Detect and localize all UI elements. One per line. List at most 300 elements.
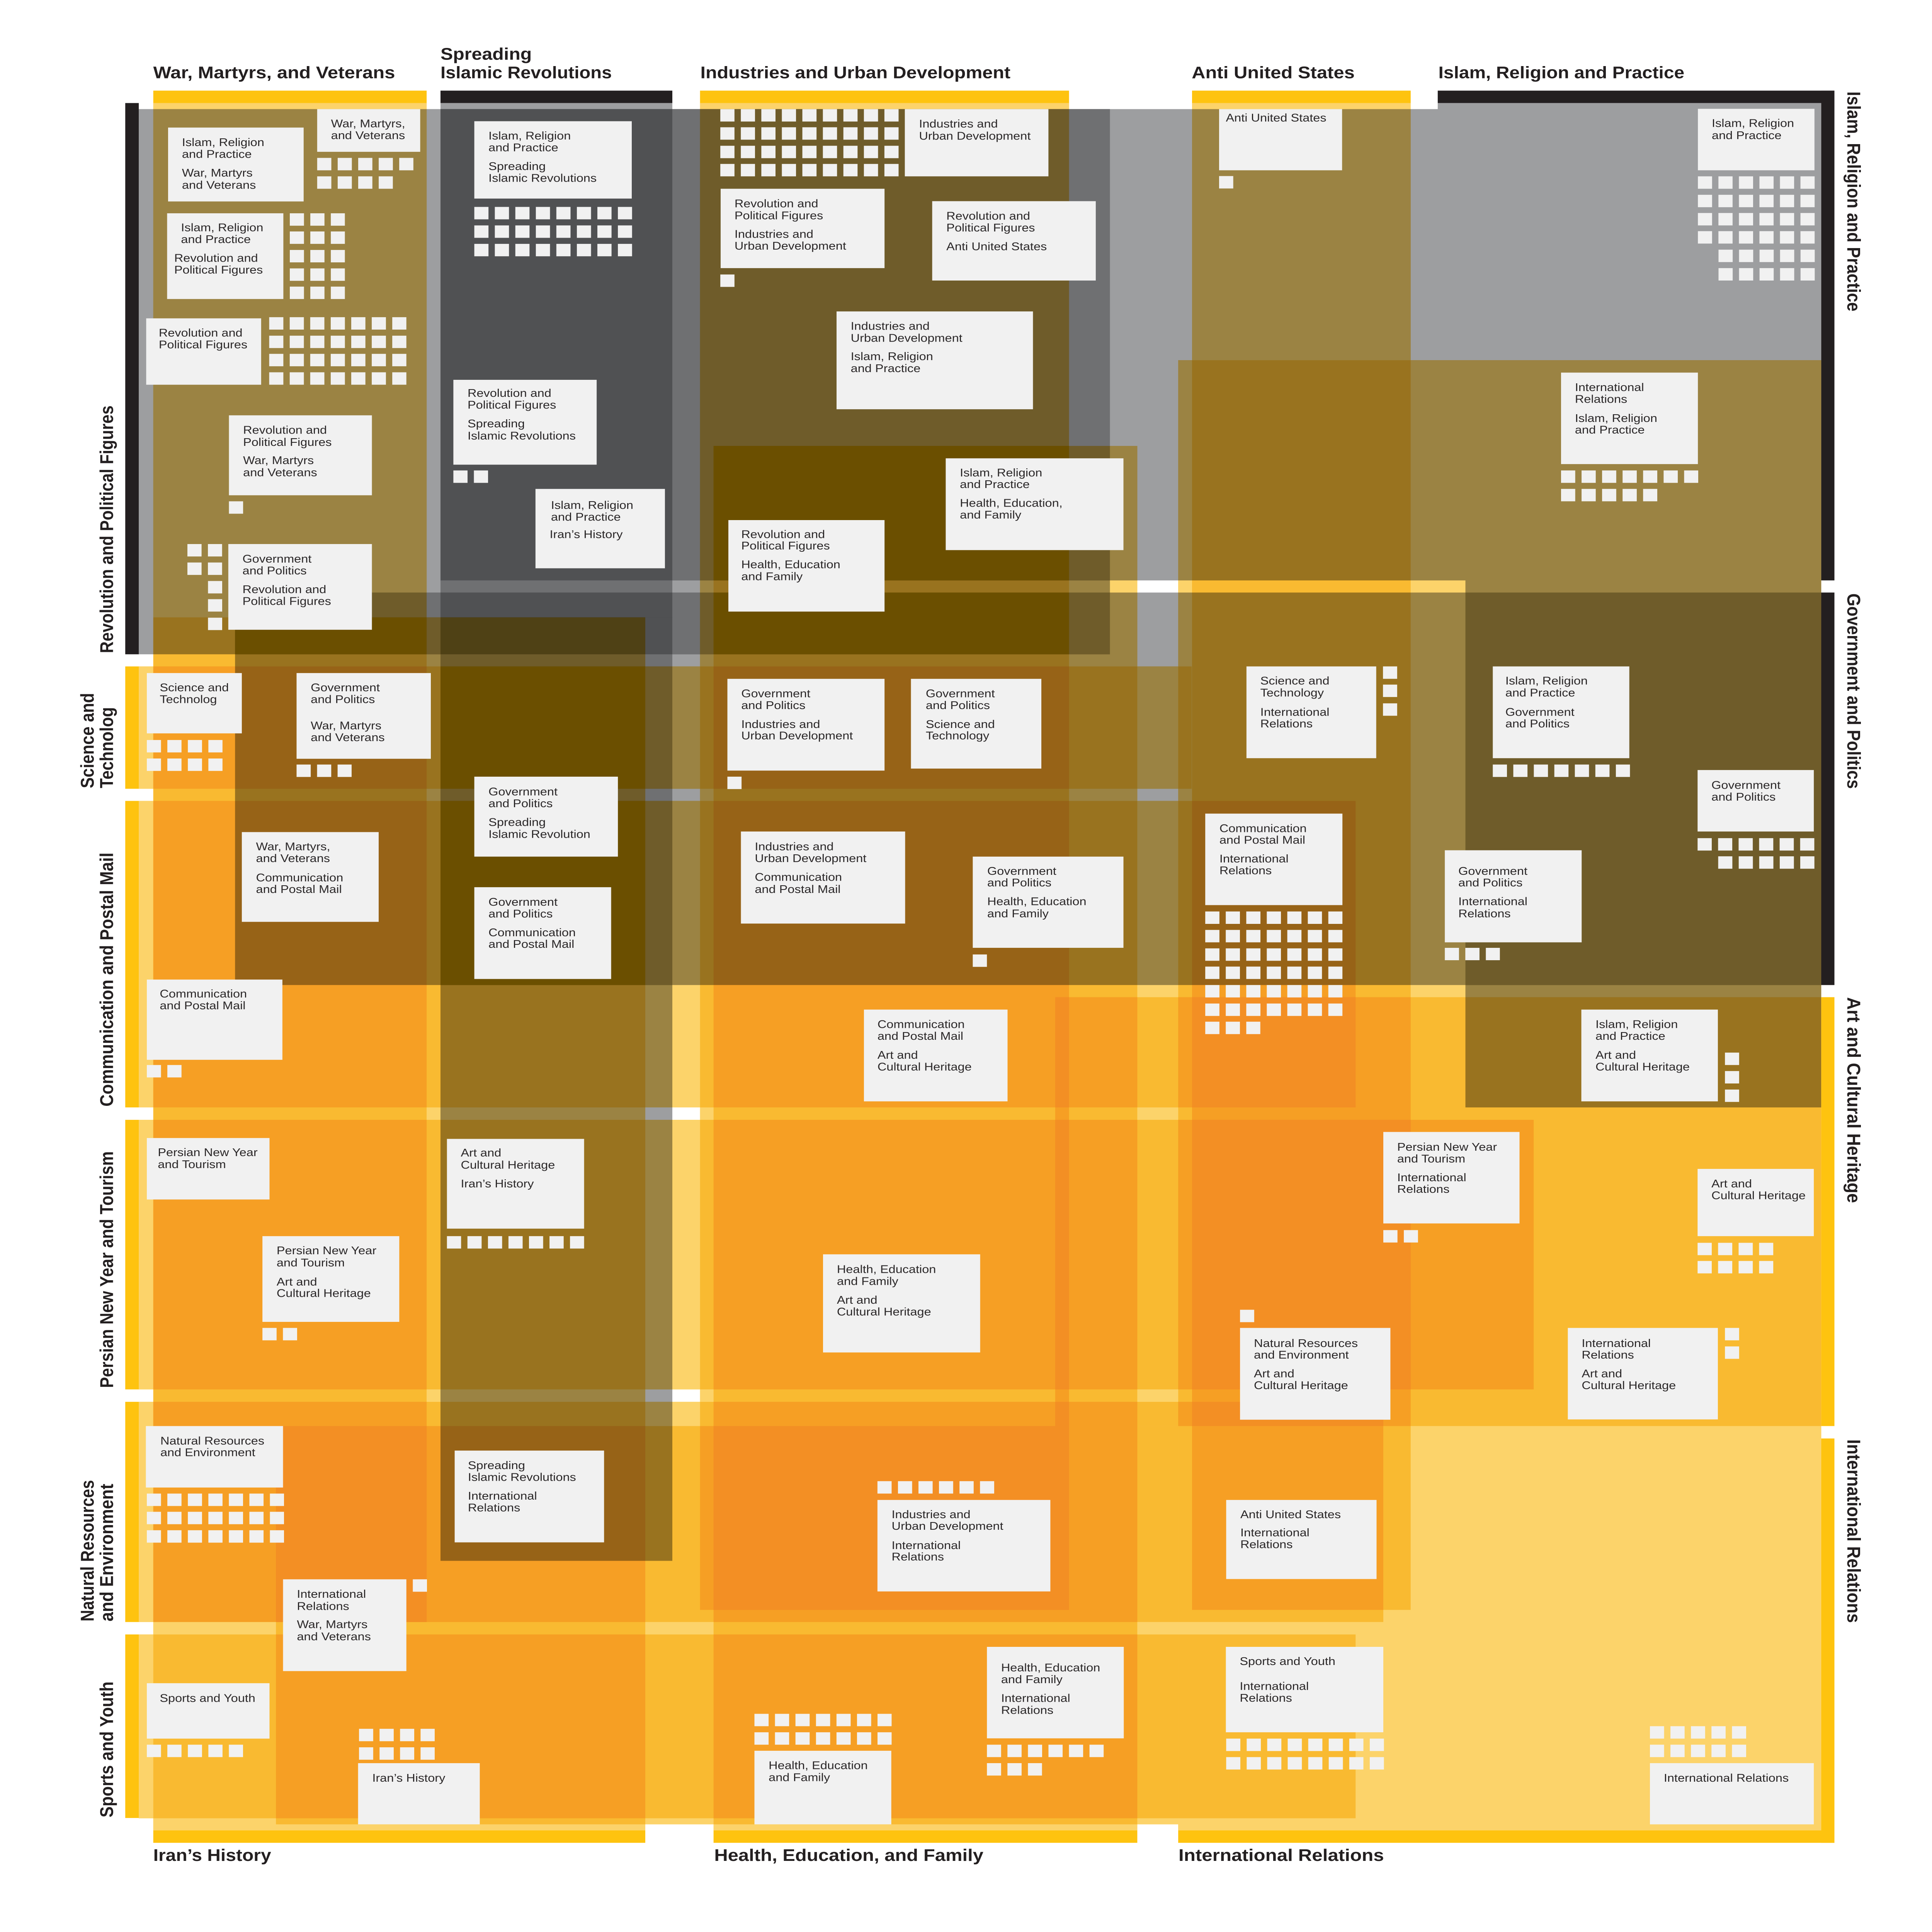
card: Health, Education and Family: and Family (769, 1771, 830, 1784)
squares (754, 1720, 892, 1738)
card: Government / War: and Veterans (311, 731, 385, 744)
card: Industries / Islam: Islam, Religion (851, 350, 933, 363)
card: Communication / International: Relations (1219, 864, 1272, 877)
band: Art and Cultural Heritage (1055, 997, 1821, 1426)
side heading: Government and Politics: Government and Politics (1843, 594, 1864, 789)
card: War / Communication: and Postal Mail (256, 883, 342, 896)
card: Government / Industries: and Politics (741, 699, 806, 712)
card: Industries / Communication: Urban Development (755, 852, 867, 865)
card: Communication and Postal Mail: and Postal Mail (160, 999, 246, 1012)
card: Industries / International: International (892, 1539, 961, 1551)
side heading: Science and Technolog: Technolog (96, 707, 117, 788)
squares (187, 550, 222, 624)
card: Health / International: International (1001, 1692, 1070, 1704)
card: Islam / Spreading (474, 121, 632, 199)
card: Science / International (1247, 667, 1376, 758)
card: Government / Health: Government (987, 865, 1056, 878)
card: Science / International: Relations (1260, 717, 1313, 730)
card: Industries and Urban Development: Industries and (919, 117, 998, 130)
squares (1240, 1308, 1254, 1324)
card: Government / Spreading: Government (488, 785, 558, 798)
card: War / Communication: and Veterans (256, 852, 330, 865)
card: Industries / Islam: Industries and (851, 320, 930, 332)
heading: Anti United States: Anti United States (1192, 63, 1355, 82)
card: Government / Revolution: Revolution and (243, 583, 326, 596)
card: Persian / Art: Cultural Heritage (277, 1287, 371, 1299)
card: Revolution / Anti United States (932, 201, 1096, 281)
band: right dark block (1465, 580, 1821, 1107)
squares (1725, 1334, 1739, 1353)
card: Islam / Iran's History: Iran’s History (549, 528, 623, 541)
card: Health / Art: Cultural Heritage (837, 1305, 931, 1318)
card: Government / Health: Health, Education (987, 895, 1087, 908)
card: International / Islam: Islam, Religion (1575, 412, 1657, 425)
card: War, Martyrs, and Veterans (317, 109, 420, 152)
card: Persian / International: and Tourism (1397, 1152, 1465, 1165)
card: International / Art: Cultural Heritage (1582, 1379, 1676, 1392)
card: Revolution / Anti United States: Revolution and (946, 209, 1030, 222)
squares (317, 164, 413, 182)
card: Natural Resources / Art (1240, 1328, 1390, 1420)
side heading: Art and Cultural Heritage: Art and Cultural Heritage (1843, 997, 1864, 1203)
card: Sports / International: Sports and Youth (1240, 1655, 1335, 1668)
card: Anti United States / International: International (1240, 1526, 1310, 1539)
squares (147, 1500, 284, 1536)
card: Revolution / Industries: Revolution and (735, 197, 818, 210)
card: Government / International: and Politics (1458, 876, 1522, 889)
card: Industries / International: Relations (892, 1550, 944, 1563)
squares (1383, 1228, 1418, 1245)
card: Science / International: Science and (1260, 674, 1330, 687)
band: War, Martyrs, and Veterans (153, 103, 427, 1622)
card: Revolution / War: Revolution and (243, 423, 327, 436)
card: Persian New Year and Tourism: Persian New Year (158, 1146, 258, 1159)
card: Islam / Health: Health, Education, (960, 497, 1063, 509)
card: Persian / Art: Persian New Year (277, 1244, 376, 1257)
card: Islam / Art: Art and (1595, 1048, 1636, 1061)
card: Islam, Religion and Practice: Islam, Religion (1712, 117, 1794, 129)
squares (147, 1063, 182, 1080)
card: Government / International: Relations (1458, 907, 1511, 920)
card: Communication / Art: and Postal Mail (878, 1030, 963, 1043)
card: Communication / International: International (1219, 852, 1289, 865)
card: Industries / Communication (741, 832, 905, 923)
card: Health / International (987, 1647, 1124, 1738)
side heading: Science and Technolog (77, 693, 117, 788)
card: War / Communication (242, 832, 379, 922)
card: Government / Science (911, 679, 1041, 769)
card: Government / Revolution: Political Figures (243, 595, 331, 607)
card: Revolution / War: and Veterans (243, 466, 317, 479)
squares (973, 952, 987, 969)
card: Anti United States / International: Relations (1240, 1538, 1293, 1551)
squares (1226, 1745, 1384, 1763)
card: War, Martyrs, and Veterans: War, Martyrs, (331, 117, 405, 130)
card: International / Art: Art and (1582, 1367, 1622, 1380)
card: Communication / Art: Cultural Heritage (878, 1060, 972, 1073)
band: Science and Technology (139, 667, 1192, 789)
card: War / Communication: Communication (256, 871, 343, 884)
card: Revolution / War: War, Martyrs (243, 454, 314, 467)
side heading: Science and Technolog: Science and (77, 693, 98, 788)
card: Islam / Health: and Practice (960, 478, 1030, 491)
card: Revolution / Health: Revolution and (741, 528, 825, 541)
squares (262, 1326, 297, 1342)
card: Art / Iran's History: Cultural Heritage (461, 1158, 555, 1171)
card: Government / Health (973, 857, 1124, 948)
card: Revolution / Anti United States: Anti United States (946, 240, 1047, 253)
card: International Relations (1650, 1763, 1814, 1824)
card: Health / International: Health, Education (1001, 1661, 1100, 1674)
band: Anti United States (1192, 103, 1411, 1610)
card: Natural Resources and Environment (146, 1426, 283, 1488)
squares (453, 468, 488, 485)
card: Science and Technolog: Technolog (160, 693, 217, 706)
card: Government / Industries: Industries and (741, 718, 820, 730)
squares (1725, 1059, 1739, 1096)
card: Communication / Art: Communication (878, 1018, 965, 1031)
card: Revolution / Industries: Political Figures (735, 209, 823, 222)
card: International / Islam (1561, 372, 1698, 464)
band: Sports and Youth (139, 1634, 1355, 1818)
card: Anti United States / International (1226, 1500, 1376, 1579)
card: Spreading / International: International (468, 1490, 537, 1502)
card: Government / Health: and Politics (987, 876, 1051, 889)
card: Revolution and Political Figures (146, 318, 261, 385)
card: Health / Art (823, 1254, 980, 1352)
side heading: Persian New Year and Tourism: Persian New Year and Tourism (96, 1151, 117, 1388)
squares (229, 499, 243, 516)
band: International Relations column (1178, 360, 1821, 1830)
card: Communication / International (1205, 814, 1342, 905)
card: Government / Science: Government (926, 687, 995, 700)
card: Islam / Revolution: Revolution and (174, 252, 258, 264)
card: Islam / Spreading: Islamic Revolutions (488, 172, 597, 184)
card: Natural Resources / Art: Natural Resources (1254, 1337, 1358, 1350)
card: Persian / International (1383, 1132, 1519, 1223)
side heading: Islam, Religion and Practice: Islam, Religion and Practice (1843, 92, 1864, 311)
card: Revolution / Spreading: Political Figures (468, 398, 556, 411)
card: Communication / International: Communication (1219, 822, 1307, 835)
card: International / Islam: Relations (1575, 393, 1627, 405)
card: Government / Communication (474, 887, 611, 979)
card: Government / Communication: and Postal Mail (488, 938, 574, 951)
card: Islam / War: Islam, Religion (182, 136, 264, 149)
squares (1698, 182, 1815, 274)
card: Islam / Government: Islam, Religion (1505, 674, 1588, 687)
band: Health, Education, and Family (714, 446, 1137, 1830)
side heading: International Relations: International Relations (1843, 1439, 1864, 1623)
card: Islam / Government: and Practice (1505, 686, 1575, 699)
squares (297, 762, 352, 779)
band: Communication and Postal Mail (139, 801, 1355, 1107)
card: Islam / Government: Government (1505, 706, 1575, 718)
card: Islam / Art: and Practice (1595, 1030, 1665, 1043)
card: Industries / Islam (837, 311, 1033, 409)
card: Islam / Revolution: Islam, Religion (181, 221, 263, 234)
card: Islam / Revolution: Political Figures (174, 264, 263, 276)
card: Industries / Islam: Urban Development (851, 332, 963, 344)
band: Spreading Islamic Revolutions (440, 103, 672, 1561)
card: Persian / International: Relations (1397, 1183, 1449, 1196)
squares (269, 323, 406, 379)
card: Government and Politics: Government (1711, 779, 1781, 791)
card: Islam / War (168, 128, 304, 201)
card: Art / Iran's History: Art and (461, 1146, 501, 1159)
card: Revolution / Industries (721, 189, 884, 268)
card: Natural Resources / Art: and Environment (1254, 1348, 1349, 1361)
card: Science and Technolog: Science and (160, 681, 229, 694)
heading: Islam, Religion and Practice: Islam, Religion and Practice (1439, 63, 1684, 82)
squares (359, 1735, 435, 1753)
card: Persian / Art (262, 1236, 399, 1322)
card: Sports / International (1226, 1647, 1383, 1732)
heading: War, Martyrs, and Veterans: War, Martyrs, and Veterans (153, 63, 395, 82)
card: Art / Iran's History: Iran’s History (461, 1177, 534, 1190)
heading: Industries and Urban Development: Industries and Urban Development (700, 63, 1010, 82)
band: Persian New Year and Tourism (139, 1120, 1534, 1389)
card: Government / Industries (727, 679, 884, 770)
card: Government / Revolution (228, 544, 372, 630)
heading: International Relations: International Relations (1179, 1846, 1384, 1865)
card: Islam / Health (946, 458, 1124, 550)
card: Persian / Art: and Tourism (277, 1256, 345, 1269)
card: Islam / Art (1581, 1010, 1718, 1101)
card: International / Art: International (1582, 1337, 1651, 1350)
squares (474, 213, 632, 250)
card: Government / Spreading (474, 777, 618, 857)
card: Science / International: Technology (1260, 686, 1324, 699)
squares (987, 1751, 1104, 1769)
card: Industries / Islam: and Practice (851, 362, 920, 374)
card: Revolution / Anti United States: Political Figures (946, 221, 1035, 234)
card: Communication and Postal Mail (147, 980, 282, 1060)
card: Art and Cultural Heritage: Cultural Heritage (1711, 1189, 1806, 1202)
card: Government / Health: and Family (987, 907, 1049, 920)
card: Communication / Art: Art and (878, 1048, 918, 1061)
squares (720, 272, 735, 289)
squares (1383, 673, 1397, 709)
card: Revolution / Health: and Family (741, 570, 803, 583)
card: Communication / Art (864, 1010, 1008, 1101)
card: Industries and Urban Development: Urban Development (919, 129, 1031, 142)
side heading: Communication and Postal Mail: Communication and Postal Mail (96, 852, 117, 1107)
card: Iran's History (358, 1763, 480, 1824)
card: Islam / Art: Cultural Heritage (1595, 1060, 1690, 1073)
card: Government and Politics: and Politics (1711, 791, 1776, 803)
squares (447, 1234, 584, 1251)
card: Revolution / Health: Health, Education (741, 558, 840, 571)
card: Spreading / International: Spreading (468, 1459, 525, 1472)
heading: Spreading Islamic Revolutions: Spreading (440, 44, 532, 63)
card: Natural Resources and Environment: Natural Resources (160, 1434, 264, 1447)
card: Government / War: and Politics (311, 693, 375, 706)
card: Government / Science: and Politics (926, 699, 990, 712)
card: International / War: International (297, 1588, 366, 1600)
card: Art and Cultural Heritage: Art and (1711, 1177, 1752, 1190)
card: Islam / Spreading: Spreading (488, 160, 546, 173)
squares (1650, 1732, 1746, 1751)
card: Sports / International: Relations (1240, 1692, 1292, 1704)
band: Government and Politics (235, 592, 1821, 985)
card: Islam / Art: Islam, Religion (1595, 1018, 1678, 1031)
card: Islam / War: War, Martyrs (182, 167, 253, 179)
squares (147, 746, 223, 765)
card: International / Islam: International (1575, 381, 1644, 394)
squares (147, 1743, 243, 1759)
card: Health / Art: and Family (837, 1275, 898, 1287)
card: Islam / Health: and Family (960, 509, 1022, 521)
card: Industries and Urban Development (905, 109, 1048, 176)
card: Art / Iran's History (447, 1139, 584, 1229)
side heading: Sports and Youth: Sports and Youth (96, 1682, 117, 1817)
card: Health, Education and Family: Health, Education (769, 1759, 868, 1772)
card: Communication / International: and Postal Mail (1219, 833, 1305, 846)
card: Revolution / Health (728, 520, 884, 612)
card: Islam / Revolution: and Practice (181, 233, 251, 246)
card: Revolution / War: Political Figures (243, 436, 332, 449)
card: Government / International: Government (1458, 865, 1527, 878)
heading: Health, Education, and Family: Health, Education, and Family (714, 1846, 984, 1865)
card: Government / War: War, Martyrs (311, 719, 381, 732)
card: Revolution / Spreading: Spreading (468, 417, 525, 430)
card: Revolution / Industries: Industries and (735, 228, 813, 240)
card: Industries / Communication: Industries and (755, 840, 833, 853)
band: Industries and Urban Development (700, 103, 1069, 1610)
card: Industries / Communication: and Postal Mail (755, 883, 841, 896)
band: Revolution and Political Figures (139, 109, 1110, 654)
card: Persian New Year and Tourism (147, 1138, 270, 1199)
card: Health / Art: Art and (837, 1293, 878, 1306)
card: Government / War: Government (311, 681, 380, 694)
card: Islam, Religion and Practice: and Practice (1712, 129, 1782, 142)
squares (878, 1479, 994, 1496)
side heading: Revolution and Political Figures: Revolution and Political Figures (96, 405, 117, 653)
card: Spreading / International (455, 1451, 604, 1543)
card: Persian New Year and Tourism: and Tourism (158, 1158, 226, 1170)
card: Industries / International: Urban Development (892, 1519, 1003, 1532)
card: Health / International: Relations (1001, 1704, 1053, 1716)
card: Government / Communication: and Politics (488, 907, 553, 920)
band: Islam, Religion and Practice (440, 103, 1821, 580)
card: Islam / Iran's History (536, 489, 665, 568)
card: Revolution / Spreading: Revolution and (468, 387, 551, 400)
band: Iran's History (153, 617, 645, 1830)
card: Islam / Government: and Politics (1505, 717, 1570, 730)
squares (1445, 946, 1500, 963)
squares (727, 775, 742, 791)
card: Islam / Revolution (167, 213, 283, 299)
card: Communication and Postal Mail: Communication (160, 987, 247, 1000)
card: Islam / Iran's History: and Practice (551, 510, 621, 523)
heading: Spreading Islamic Revolutions: Islamic Revolutions (440, 63, 612, 82)
card: Government / Science: Technology (926, 729, 990, 742)
card: International / War: War, Martyrs (297, 1618, 367, 1631)
card: Government / Communication: Communication (488, 926, 576, 939)
card: Industries / Communication: Communication (755, 871, 842, 883)
card: Revolution / Spreading (453, 380, 597, 465)
card: Revolution / Health: Political Figures (741, 539, 830, 552)
card: International / War: and Veterans (297, 1630, 371, 1643)
card: Sports and Youth (147, 1683, 270, 1739)
card: Spreading / International: Relations (468, 1501, 520, 1514)
squares (720, 115, 899, 170)
card: Revolution and Political Figures: Revolution and (159, 326, 243, 339)
card: Natural Resources and Environment: and Environment (160, 1446, 255, 1459)
card: Revolution / Spreading: Islamic Revolutions (468, 429, 576, 442)
squares (1205, 918, 1342, 1028)
card: Government / Industries: Urban Development (741, 729, 853, 742)
card: Government / International: International (1458, 895, 1527, 908)
card: Science and Technolog (147, 673, 242, 733)
card: Persian / International: Persian New Year (1397, 1141, 1497, 1153)
card: Government / International (1445, 850, 1582, 942)
card: War, Martyrs, and Veterans: and Veterans (331, 129, 405, 142)
card: International / War (283, 1579, 406, 1671)
card: Spreading / International: Islamic Revolutions (468, 1471, 576, 1483)
card: Persian / Art: Art and (277, 1275, 317, 1288)
card: Government / Revolution: Government (243, 552, 312, 565)
card: Government / Revolution: and Politics (243, 564, 307, 577)
squares (413, 1577, 427, 1594)
card: Anti United States / International: Anti United States (1240, 1508, 1341, 1520)
card: International / War: Relations (297, 1600, 349, 1612)
card: International / Islam: and Practice (1575, 423, 1645, 436)
card: Revolution / War (229, 415, 372, 495)
card: Government / Communication: Government (488, 895, 558, 908)
card: Sports and Youth: Sports and Youth (160, 1692, 255, 1704)
squares (1697, 1249, 1773, 1267)
card: International / Art: Relations (1582, 1348, 1634, 1361)
squares (1219, 174, 1233, 190)
card: Revolution and Political Figures: Political Figures (159, 338, 247, 351)
side heading: Natural Resources and Environment: Natural Resources (77, 1480, 98, 1621)
card: Health, Education and Family (754, 1751, 891, 1824)
side heading: Natural Resources and Environment: and Environment (96, 1484, 117, 1621)
card: Natural Resources / Art: Cultural Heritage (1254, 1379, 1348, 1392)
squares (1493, 762, 1630, 779)
card: Islam / Health: Islam, Religion (960, 466, 1042, 479)
card: Art and Cultural Heritage (1697, 1169, 1814, 1236)
card: International / Art (1568, 1328, 1718, 1419)
card: Natural Resources / Art: Art and (1254, 1367, 1294, 1380)
card: Industries / International: Industries and (892, 1508, 971, 1520)
card: Government / Spreading: and Politics (488, 797, 553, 810)
card: Islam / Spreading: and Practice (488, 141, 558, 154)
card: Government / Industries: Government (741, 687, 811, 700)
card: International Relations: International Relations (1664, 1771, 1789, 1784)
card: Islam / Spreading: Islam, Religion (488, 129, 571, 142)
squares (290, 219, 345, 293)
card: Science / International: International (1260, 706, 1330, 718)
squares (1561, 477, 1698, 495)
card: Persian / International: International (1397, 1171, 1466, 1184)
band: lower overlap block (276, 1426, 1178, 1824)
card: Government / Spreading: Spreading (488, 816, 546, 828)
card: Government and Politics (1697, 770, 1814, 832)
card: Islam / Iran's History: Islam, Religion (551, 498, 633, 511)
card: Health / International: and Family (1001, 1673, 1063, 1686)
card: Revolution / Industries: Urban Development (735, 240, 846, 252)
card: Anti United States: Anti United States (1226, 111, 1327, 124)
card: Government / Spreading: Islamic Revolution (488, 828, 590, 840)
side heading: Natural Resources and Environment (77, 1480, 117, 1621)
heading: Iran's History: Iran’s History (153, 1846, 271, 1865)
card: Industries / International (878, 1500, 1050, 1592)
band: Natural Resources and Environment (139, 1402, 1383, 1622)
squares (1697, 844, 1815, 862)
card: War / Communication: War, Martyrs, (256, 840, 330, 853)
